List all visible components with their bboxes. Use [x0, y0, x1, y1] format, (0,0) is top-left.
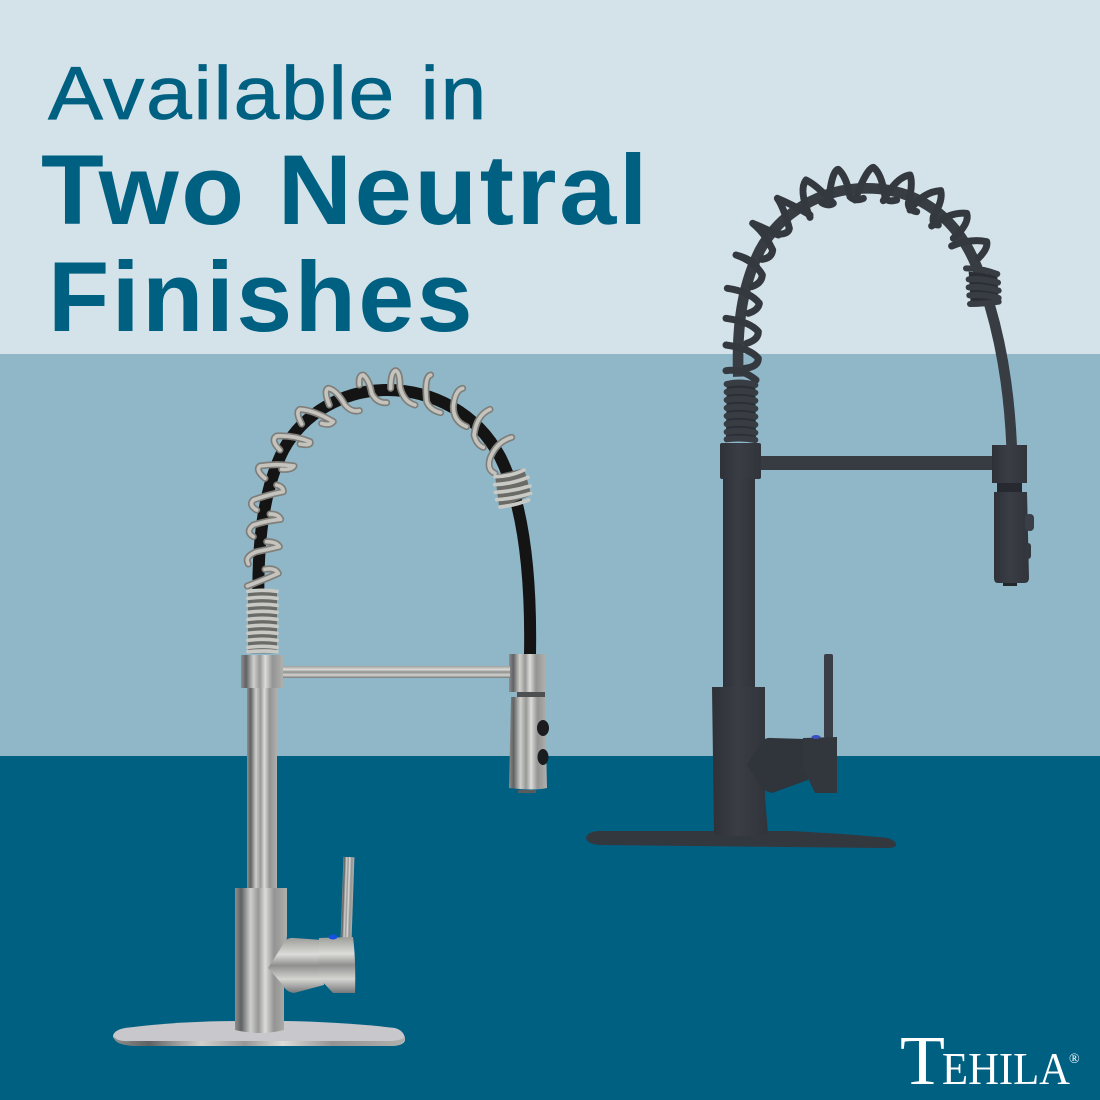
background band: deep teal floor: [0, 756, 1100, 1100]
body and lever: [235, 857, 355, 1033]
title: [41, 51, 650, 352]
body and lever: [712, 654, 837, 836]
faucet: brushed stainless finish: [113, 371, 549, 1046]
logo: Tehila: EHILA: [942, 1043, 1070, 1094]
deck plate: [586, 831, 896, 848]
title: Two Neutral: [41, 134, 650, 245]
title: Finishes: [48, 241, 475, 352]
logo: Tehila: [900, 1023, 1080, 1100]
background band: mid blue: [0, 354, 1100, 756]
pull-down head: [509, 654, 549, 793]
neck and crossbar: [720, 443, 992, 687]
logo: Tehila: T: [900, 1023, 945, 1100]
logo: Tehila: ®: [1069, 1052, 1080, 1067]
neck and crossbar: [241, 655, 510, 888]
background band: light top: [0, 0, 1100, 354]
spout hose and spring: [726, 167, 1012, 447]
deck plate: [113, 1021, 405, 1046]
spout hose and spring: [247, 371, 531, 655]
title: Available in: [48, 51, 488, 135]
pull-down head: [992, 445, 1034, 586]
faucet: matte black finish: [586, 167, 1034, 848]
